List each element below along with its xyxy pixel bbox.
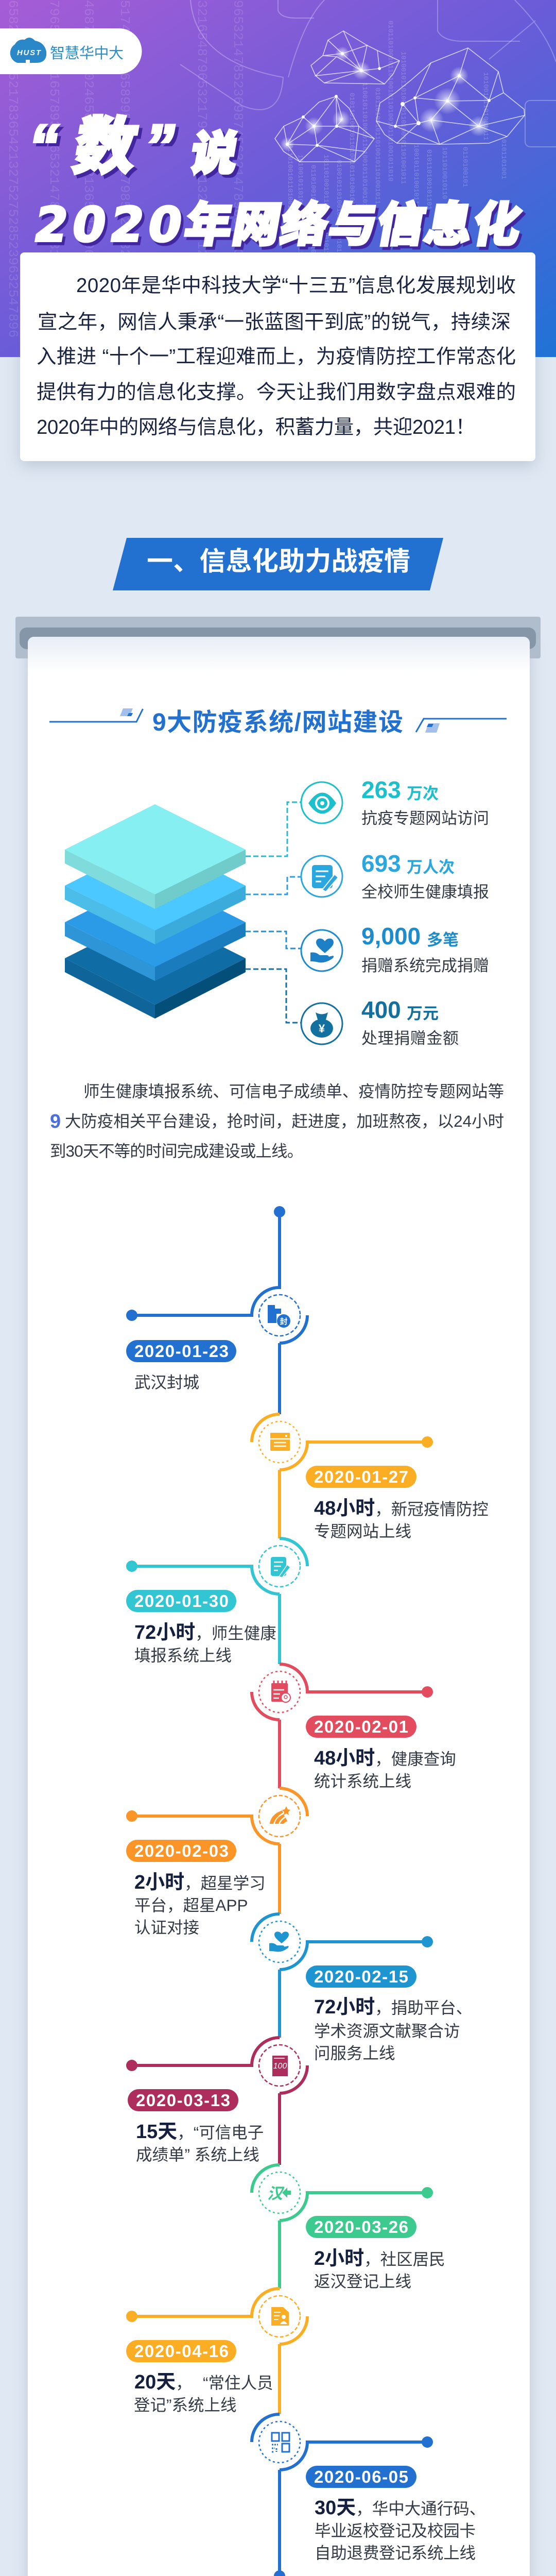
title: “数”说: “ <box>24 112 65 179</box>
intro paragraph: 2020年中的网络与信息化，积蓄力量，共迎2021！ <box>37 416 475 438</box>
timeline node: 2020-01-23 <box>126 1212 307 1414</box>
stat: 400万元: 400 <box>361 996 401 1023</box>
stat: 693万人次: 全校师生健康填报 <box>361 883 489 901</box>
intro paragraph: 宣之年，网信人秉承“一张蓝图干到底”的锐气，持续深 <box>38 311 511 333</box>
hero background with data rain and network clouds: 010110100101101 <box>425 149 433 210</box>
title: “数”说: 说 <box>187 128 242 180</box>
timeline node: 2020-02-15: 问服务上线 <box>314 2044 395 2062</box>
intro card <box>20 252 535 461</box>
icon: return to Wuhan: 汉 <box>267 2185 285 2202</box>
timeline node: 2020-04-16: 2020-04-16 <box>134 2342 229 2361</box>
icon: transcript with 100: 100 <box>273 2062 287 2071</box>
intro paragraph: 2020年是华中科技大学“十三五”信息化发展规划收 <box>76 275 516 297</box>
timeline node: 2020-01-30: 72小时，师生健康 <box>134 1622 276 1643</box>
timeline node: 2020-02-03: 2020-02-03 <box>134 1841 229 1860</box>
summary paragraph: 9 <box>50 1111 61 1132</box>
icon: QR code <box>272 2433 289 2452</box>
logo pill <box>0 28 142 74</box>
subtitle: 9大防疫系统/网站建设: 9大防疫系统/网站建设 <box>152 709 403 736</box>
hero background with data rain and network clouds: 796593542165789324653214789652314587965412 <box>46 0 62 337</box>
timeline node: 2020-04-16: “常住人员 <box>203 2374 273 2392</box>
timeline node: 2020-03-13: 15天，“可信电子 <box>136 2121 264 2143</box>
icon: locked-down building <box>268 1305 290 1328</box>
hero background with data rain and network clouds: 1010010110100101101001011 <box>297 155 304 255</box>
stat: 693万人次 <box>301 850 489 901</box>
timeline node: 2020-01-27: 专题网站上线 <box>314 1522 411 1540</box>
summary paragraph: 师生健康填报系统、可信电子成绩单、疫情防控专题网站等 <box>83 1082 504 1100</box>
timeline node: 2020-03-26 <box>252 2165 445 2291</box>
timeline node: 2020-01-30 <box>126 1538 307 1665</box>
icon: cloud logo: HUST <box>17 48 42 57</box>
section banner: 一、信息化助力战疫情 <box>113 538 443 590</box>
layer 2 <box>65 840 246 944</box>
intro paragraph: 入推进 “十个一”工程迎难而上，为疫情防控工作常态化 <box>37 346 516 368</box>
hero background with data rain and network clouds: 1001011010010110 <box>412 144 420 209</box>
title: 2020年网络与信息化: 2020 <box>30 197 186 252</box>
timeline <box>126 1206 489 2576</box>
timeline node: 2020-04-16 <box>126 2289 307 2414</box>
timeline node: 2020-02-15: 学术资源文献聚合访 <box>314 2022 460 2040</box>
timeline node: 2020-02-15: 2020-02-15 <box>314 1967 408 1986</box>
hero background with data rain and network clouds: 1100101101001011010010110100101 <box>361 82 369 207</box>
title: “数”说: 数 <box>68 112 143 181</box>
timeline node: 2020-06-05 <box>252 2414 485 2576</box>
timeline node: 2020-02-15: 72小时，捐助平台、 <box>314 1996 472 2018</box>
icon: heart in hand <box>310 939 334 962</box>
icon: shooting star <box>270 1806 290 1824</box>
hero background with data rain and network clouds: 1011010010110 <box>441 147 448 199</box>
main panel shadow <box>28 637 530 2576</box>
timeline node: 2020-01-27: 2020-01-27 <box>314 1467 408 1486</box>
timeline node: 2020-02-03 <box>126 1788 307 1937</box>
layer 3 <box>65 877 246 981</box>
isometric layer stack <box>65 804 246 1019</box>
timeline node: 2020-01-23: 2020-01-23 <box>134 1342 229 1361</box>
title: “数”说 <box>24 112 242 181</box>
stat: 263万次 <box>301 776 489 827</box>
hero background with data rain and network clouds: 0101101001011010010110100101101001011010 <box>387 21 394 181</box>
icon: locked-down building: 封 <box>280 1317 288 1326</box>
dashed connectors <box>246 802 301 1023</box>
icon: cloud logo <box>10 38 46 63</box>
hero background with data rain and network clouds: 101101001011010010110101101 <box>322 155 330 263</box>
timeline node: 2020-01-27: 48小时，新冠疫情防控 <box>314 1498 489 1519</box>
hero background with data rain and network clouds: 321654879653217987456213289654123654789512 <box>194 0 210 337</box>
hero background with data rain and network clouds: 01011010010110100101101001011 <box>374 88 381 204</box>
stat: 693万人次: 693 <box>361 850 401 877</box>
stat: 9,000多笔: 捐赠系统完成捐赠 <box>361 957 489 975</box>
hero background with data rain and network clouds: 01011010010110100101101001011010 <box>348 93 356 222</box>
timeline node: 2020-06-05: 自助退费登记系统上线 <box>315 2544 476 2562</box>
timeline start dot <box>274 1206 285 1217</box>
timeline node: 2020-02-03: 平台，超星APP <box>134 1896 248 1914</box>
stat: 693万人次: 万人次 <box>407 858 455 876</box>
timeline node: 2020-06-05: 毕业返校登记及校园卡 <box>315 2521 476 2540</box>
timeline node: 2020-03-26: 2020-03-26 <box>314 2217 408 2236</box>
stat: 9,000多笔: 9,000 <box>361 923 421 950</box>
timeline node: 2020-02-15 <box>252 1914 472 2062</box>
summary paragraph: 到30天不等的时间完成建设或上线。 <box>50 1142 303 1160</box>
subtitle: 9大防疫系统/网站建设 <box>49 708 507 736</box>
stat: 9,000多笔: 多笔 <box>427 931 459 949</box>
stat: 263万次: 263 <box>361 776 401 803</box>
intro card shadow <box>20 252 535 461</box>
title: “数”说: ” <box>140 112 181 179</box>
timeline node: 2020-03-13 <box>126 2038 307 2165</box>
section banner: 一、信息化助力战疫情: 一、信息化助力战疫情 <box>147 547 410 576</box>
hero background with data rain and network clouds: 0100101101001011010010110 <box>335 160 343 260</box>
layer 4 <box>65 913 246 1019</box>
timeline node: 2020-06-05: 2020-06-05 <box>314 2467 408 2486</box>
stat: 263万次: 抗疫专题网站访问 <box>361 809 489 827</box>
timeline node: 2020-02-03: 认证对接 <box>134 1918 199 1937</box>
hero background with data rain and network clouds: 468721021024658932354213652147965321458796 <box>81 0 96 337</box>
hero background with data rain and network clouds: 517430214658995446213279854216325478965412 <box>117 0 132 337</box>
stat: 9,000多笔 <box>301 923 489 975</box>
icon: calendar search <box>271 1681 290 1702</box>
stat: 400万元 <box>301 996 459 1047</box>
timeline node: 2020-01-23: 武汉封城 <box>134 1373 199 1392</box>
hero background with data rain and network clouds: 0101101001 <box>500 139 508 179</box>
timeline node: 2020-04-16: 20天， <box>134 2371 192 2393</box>
intro paragraph: 提供有力的信息化支撑。今天让我们用数字盘点艰难的 <box>37 381 516 403</box>
intro paragraph <box>37 275 516 438</box>
stat: 263万次: 万次 <box>407 785 439 803</box>
icon: eye <box>308 792 336 814</box>
title: 2020年网络与信息化: 年网络与信息化 <box>181 198 526 251</box>
hero background with data rain and network clouds: 0110100101 <box>461 147 469 187</box>
icon: ID card <box>271 2307 289 2326</box>
hero background with data rain and network clouds: 01101001011010010110100 <box>309 165 317 257</box>
timeline node: 2020-02-01 <box>252 1664 456 1790</box>
summary paragraph: 大防疫相关平台建设，抢时间，赶进度，加班熬夜，以24小时 <box>65 1112 504 1130</box>
hero background with data rain and network clouds: 658205496521783654213275275285239632547896 <box>5 0 21 337</box>
stat: 400万元: 万元 <box>407 1005 439 1023</box>
timeline node: 2020-02-01: 统计系统上线 <box>314 1772 411 1790</box>
title: 2020年网络与信息化 <box>30 197 526 252</box>
summary paragraph <box>50 1082 504 1160</box>
hero background with data rain and network clouds <box>0 0 556 357</box>
hero background with data rain and network clouds: 965321478523698745632147896541236589 <box>230 0 246 290</box>
icon: server <box>270 1433 290 1451</box>
timeline node: 2020-02-03: 2小时，超星学习 <box>134 1872 266 1893</box>
timeline node: 2020-01-27 <box>252 1414 489 1540</box>
timeline node: 2020-01-30: 填报系统上线 <box>134 1646 232 1665</box>
timeline node: 2020-03-13: 成绩单” 系统上线 <box>136 2145 259 2164</box>
icon: heart in hand <box>269 1931 289 1952</box>
main panel frame <box>15 617 541 2576</box>
icon: form with pen <box>271 1557 290 1578</box>
timeline node: 2020-03-26: 2小时，社区居民 <box>314 2248 445 2269</box>
hero background with data rain and network clouds: 10100101101001011 <box>482 72 490 141</box>
icon: transcript with 100 <box>272 2056 288 2076</box>
layer 1 <box>65 804 246 909</box>
stat: 400万元: 处理捐赠金额 <box>361 1029 459 1047</box>
hero background with data rain and network clouds: 0110100101101001011010 <box>286 144 294 233</box>
timeline node: 2020-02-01: 48小时，健康查询 <box>314 1748 456 1769</box>
timeline node: 2020-03-26: 返汉登记上线 <box>314 2272 411 2291</box>
icon: money bag: ¥ <box>319 1022 325 1035</box>
icon: form with pen <box>312 865 338 892</box>
hero background with data rain and network clouds: 101001011010010110100101101001011 <box>399 52 407 184</box>
logo pill: 智慧华中大 <box>50 45 124 62</box>
timeline node: 2020-02-01: 2020-02-01 <box>314 1717 408 1736</box>
icon: money bag <box>310 1012 333 1038</box>
timeline node: 2020-01-30: 2020-01-30 <box>134 1591 229 1611</box>
icon: return to Wuhan <box>267 2185 291 2202</box>
timeline node: 2020-03-13: 2020-03-13 <box>136 2091 230 2110</box>
timeline node: 2020-04-16: 登记”系统上线 <box>134 2396 237 2414</box>
timeline node: 2020-06-05: 30天，华中大通行码、 <box>315 2497 485 2519</box>
